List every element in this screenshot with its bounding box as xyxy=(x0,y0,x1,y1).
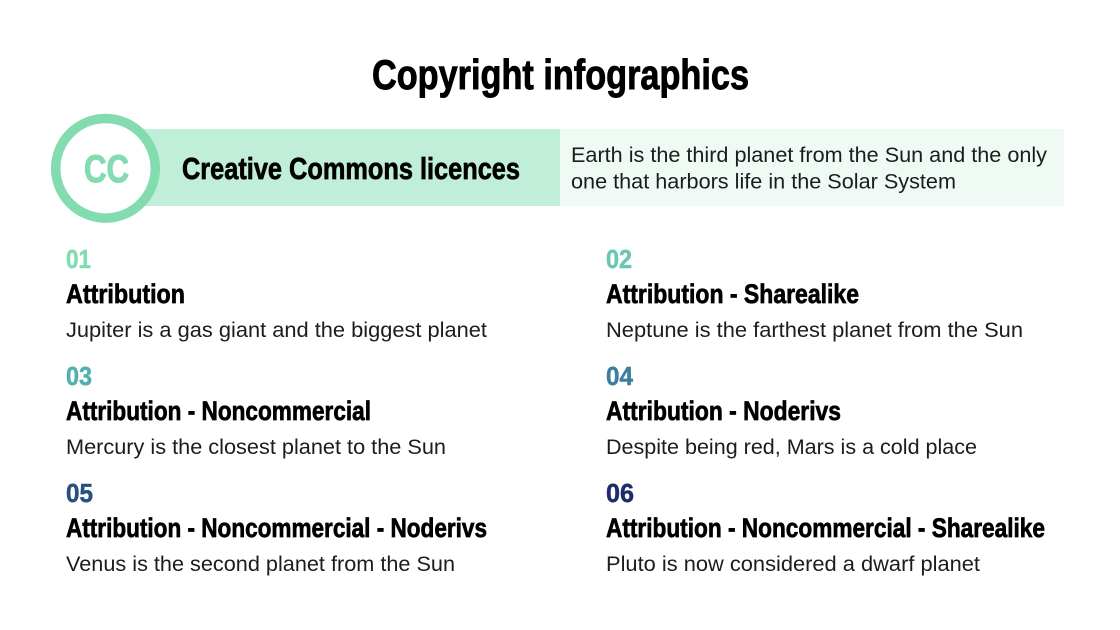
item 02: Attribution - Sharealike xyxy=(606,279,859,309)
item 02: 02 xyxy=(606,244,632,274)
banner description: Earth is the third planet from the Sun and the only xyxy=(571,144,1048,167)
banner heading: Creative Commons licences xyxy=(182,151,520,186)
item 01: 01 xyxy=(66,244,91,274)
item 03: Attribution - Noncommercial xyxy=(66,396,371,426)
banner: description band xyxy=(560,129,1064,206)
item 06: Pluto is now considered a dwarf planet xyxy=(606,553,980,576)
panel: creative commons banner xyxy=(56,118,1064,218)
title: Copyright infographics xyxy=(372,51,749,98)
icon: cc circle: CC xyxy=(84,148,129,191)
item 01: Attribution xyxy=(66,279,185,309)
banner: heading band xyxy=(105,129,560,206)
item 04: 04 xyxy=(606,361,634,391)
item 02: Neptune is the farthest planet from the Sun xyxy=(606,319,1023,342)
item 06: Attribution - Noncommercial - Sharealike xyxy=(606,513,1045,543)
item 04 xyxy=(606,361,977,459)
item 06: 06 xyxy=(606,478,634,508)
item 06 xyxy=(606,478,1045,576)
banner description: one that harbors life in the Solar System xyxy=(571,170,956,194)
item 04: Attribution - Noderivs xyxy=(606,396,841,426)
item 05: 05 xyxy=(66,478,93,508)
item 03: Mercury is the closest planet to the Sun xyxy=(66,436,446,459)
item 01 xyxy=(66,244,487,342)
item 03: 03 xyxy=(66,361,92,391)
item 04: Despite being red, Mars is a cold place xyxy=(606,436,977,459)
item 01: Jupiter is a gas giant and the biggest planet xyxy=(66,319,487,342)
item 05 xyxy=(66,478,487,576)
item 03 xyxy=(66,361,446,459)
item 05: Attribution - Noncommercial - Noderivs xyxy=(66,513,487,543)
banner description xyxy=(571,144,1048,194)
item 02 xyxy=(606,244,1023,342)
item 05: Venus is the second planet from the Sun xyxy=(66,553,455,576)
icon: cc circle xyxy=(56,118,155,218)
